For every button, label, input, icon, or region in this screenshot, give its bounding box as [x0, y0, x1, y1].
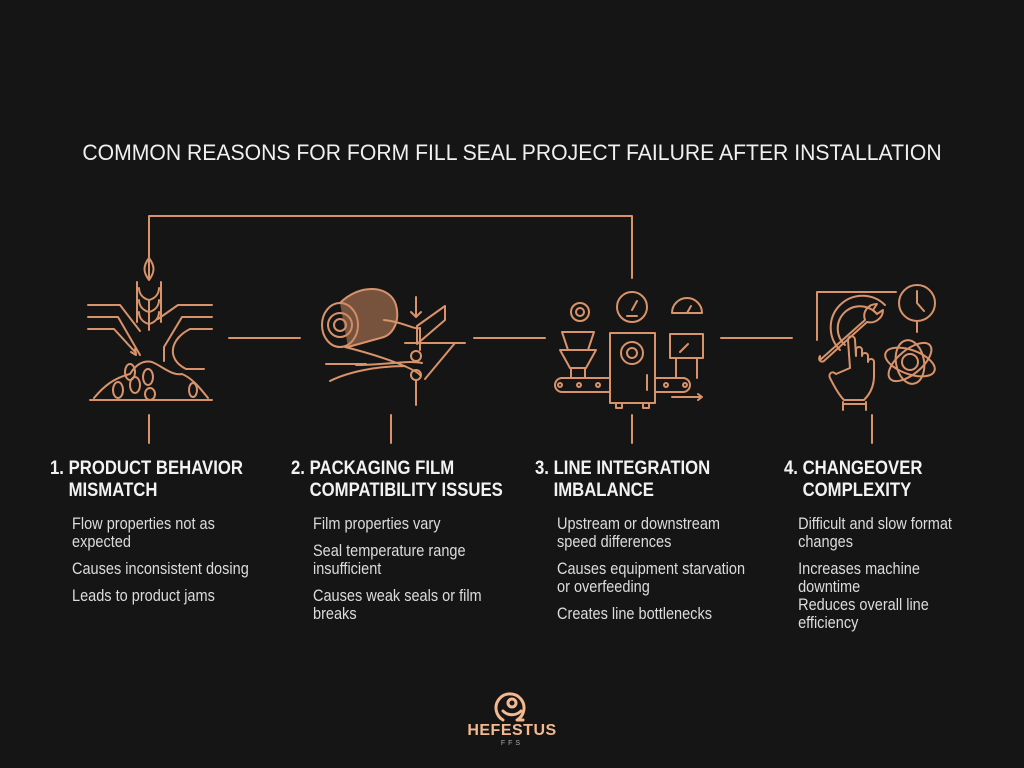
icon: grain flow [88, 258, 212, 400]
logo: Hefestus [496, 694, 524, 720]
column 3: line integration: IMBALANCE [554, 480, 654, 501]
column 2: packaging film: Film properties vary [313, 515, 440, 533]
column 1: product behavior: Causes inconsistent dosing [72, 560, 249, 578]
column 3: line integration: Causes equipment starvation or overfeeding [557, 560, 745, 596]
column 4: changeover: Difficult and slow format changes [798, 515, 952, 551]
column 1: product behavior: Leads to product jams [72, 587, 215, 605]
column 1: product behavior: Flow properties not as expected [72, 515, 215, 551]
column 4: changeover: COMPLEXITY [803, 480, 911, 501]
connector: top bracket [149, 216, 632, 278]
column 3: line integration [535, 458, 745, 623]
column 4: changeover [784, 458, 952, 632]
logo text: HEFESTUS [467, 722, 557, 739]
connectors: vertical ticks [149, 415, 872, 443]
column 4: changeover: Increases machine downtime [798, 560, 920, 596]
column 1: product behavior: 1. PRODUCT BEHAVIOR [50, 458, 243, 479]
title: COMMON REASONS FOR FORM FILL SEAL PROJECT FAILURE AFTER INSTALLATION [82, 140, 942, 165]
column 3: line integration: 3. LINE INTEGRATION [535, 458, 710, 479]
column 4: changeover: 4. CHANGEOVER [784, 458, 922, 479]
column 3: line integration: Creates line bottlenecks [557, 605, 712, 623]
column 4: changeover: Reduces overall line efficiency [798, 596, 929, 632]
icon: film roll and sealer [322, 289, 465, 405]
column 1: product behavior [50, 458, 249, 605]
logo text: FFS [501, 740, 523, 747]
column 2: packaging film: Seal temperature range insufficient [313, 542, 466, 578]
column 3: line integration: Upstream or downstream speed differences [557, 515, 720, 551]
column 2: packaging film: COMPATIBILITY ISSUES [310, 480, 503, 501]
icon: changeover [817, 285, 939, 410]
column 2: packaging film: 2. PACKAGING FILM [291, 458, 454, 479]
logo text [467, 722, 557, 747]
column 1: product behavior: MISMATCH [69, 480, 157, 501]
column 2: packaging film [291, 458, 503, 623]
connectors: horizontal [229, 337, 792, 339]
icon: line integration [555, 292, 703, 408]
column 2: packaging film: Causes weak seals or film breaks [313, 587, 482, 623]
